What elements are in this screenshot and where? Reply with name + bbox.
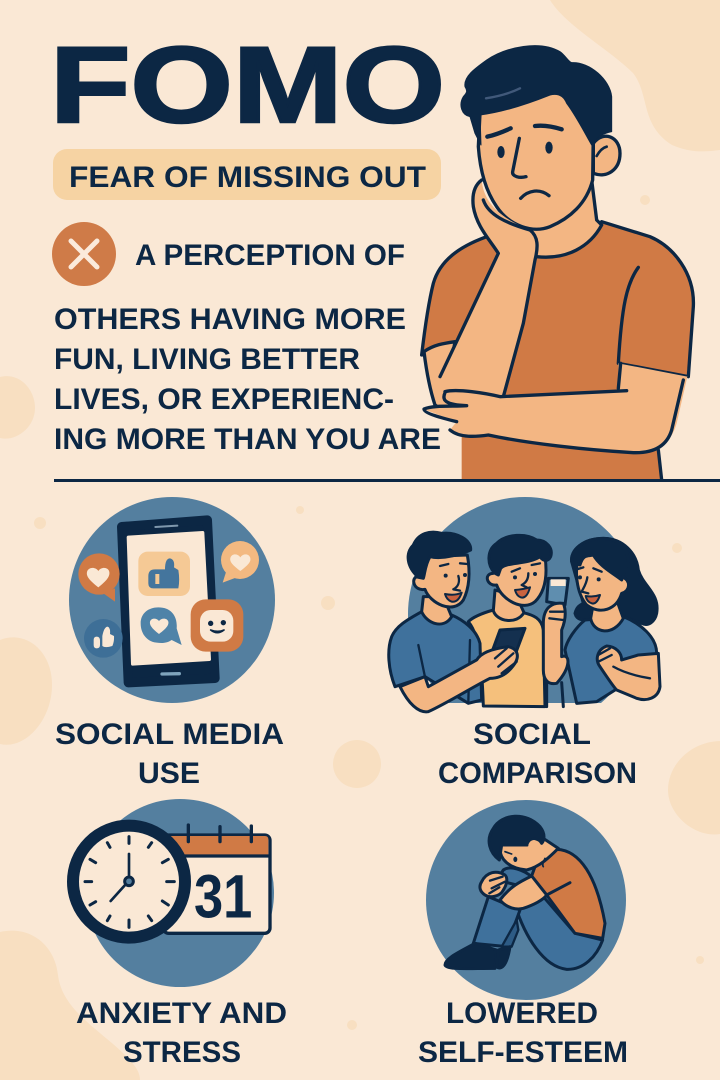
- definition text: A PERCEPTION OF: [135, 239, 405, 272]
- panel: lowered self-esteem: [418, 800, 628, 1069]
- definition text: ING MORE THAN YOU ARE: [54, 423, 441, 456]
- icon: calendar: [163, 825, 270, 933]
- illustration: worried man: [422, 46, 693, 480]
- label: lowered self-esteem: SELF-ESTEEM: [418, 1036, 628, 1069]
- definition text: [54, 239, 441, 456]
- label: social comparison: SOCIAL: [473, 718, 591, 751]
- label: lowered self-esteem: LOWERED: [446, 997, 598, 1030]
- illustration: person hugging knees: [445, 816, 605, 969]
- label: social media use: SOCIAL MEDIA: [55, 718, 284, 751]
- label: anxiety and stress: ANXIETY AND: [76, 997, 287, 1030]
- label: anxiety and stress: STRESS: [123, 1036, 241, 1069]
- subtitle pill: [53, 149, 441, 200]
- definition text: OTHERS HAVING MORE: [54, 303, 406, 336]
- label: lowered self-esteem: [418, 997, 628, 1069]
- subtitle pill: FEAR OF MISSING OUT: [69, 161, 426, 194]
- left friend's arm: [400, 647, 517, 712]
- label: social comparison: [438, 718, 637, 790]
- panel: anxiety and stress: [73, 799, 287, 1069]
- right friend: [565, 538, 660, 703]
- panel: social media use: [55, 497, 284, 790]
- definition text: LIVES, OR EXPERIENC-: [54, 383, 394, 416]
- illustration: three friends: [389, 532, 660, 712]
- title: FOMO: [50, 24, 445, 145]
- raised arm with phone: [547, 578, 568, 605]
- icon: clock: [73, 826, 185, 938]
- icon: calendar: 31: [194, 862, 252, 930]
- label: social media use: [55, 718, 284, 790]
- phone held low: [493, 628, 525, 655]
- left friend: [389, 532, 482, 703]
- middle friend: [468, 535, 551, 707]
- label: social comparison: COMPARISON: [438, 757, 637, 790]
- icon: phone with reactions: [78, 520, 259, 683]
- label: social media use: USE: [138, 757, 200, 790]
- icon: x mark: [52, 222, 116, 286]
- divider: [54, 479, 720, 482]
- label: anxiety and stress: [76, 997, 287, 1069]
- definition text: FUN, LIVING BETTER: [54, 343, 360, 376]
- panel: social comparison: [389, 497, 660, 790]
